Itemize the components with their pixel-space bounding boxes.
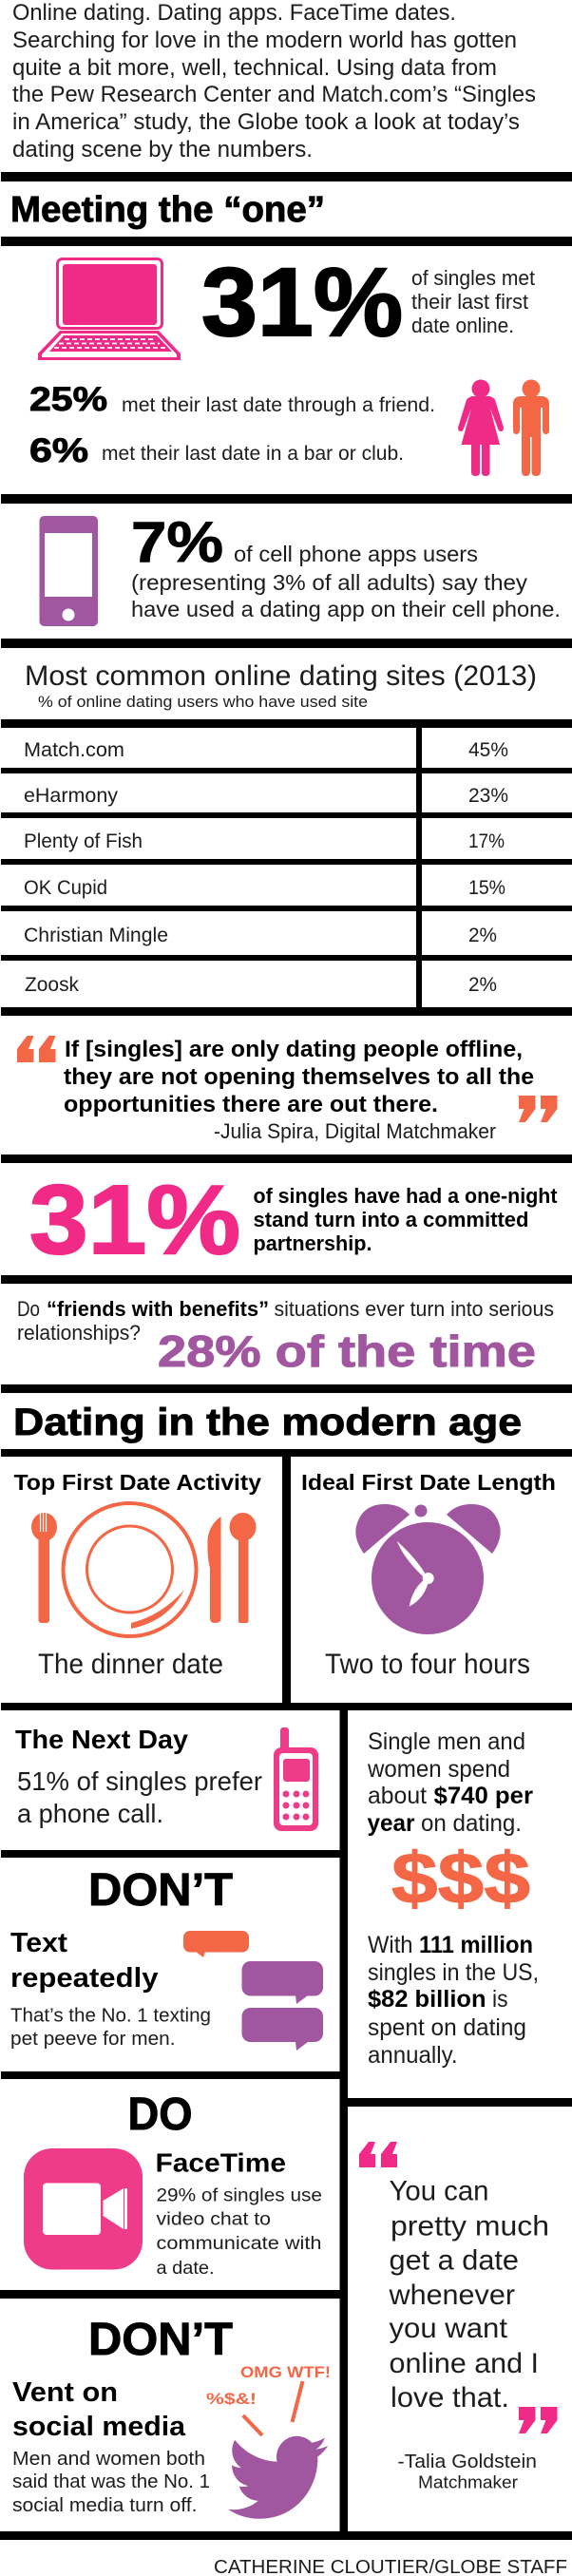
text: one-night stand [253, 1184, 558, 1255]
subheading: Top First Date Activity [13, 1470, 261, 1495]
text: total spending: spent on dating [368, 2014, 526, 2041]
text: total spending: annually. [368, 2042, 458, 2069]
panel: Talia Goldstein quote [359, 2142, 557, 2491]
text: app users [131, 542, 561, 621]
text: of singles met online: date online. [411, 314, 514, 337]
row: Zoosk: 2% [468, 974, 497, 996]
row: Match.com: 45% [468, 739, 508, 761]
subheading: Ideal First Date Length [301, 1470, 556, 1495]
stat: 25 percent: 25% [29, 381, 107, 418]
text: pet peeve [10, 2005, 211, 2050]
attribution: Matchmaker [418, 2472, 518, 2491]
row: OK Cupid: 15% [468, 877, 505, 899]
exclamations: %$&! [206, 2390, 257, 2408]
heading: most common dating sites: Most common online dating sites (2013) [25, 660, 537, 692]
quote text: you want [390, 2313, 508, 2344]
stat: 6 percent: met their last date in a bar or club. [102, 443, 404, 465]
row: Match.com [24, 739, 508, 761]
icon: closing quote [519, 2407, 557, 2433]
subheading: FaceTime: FaceTime [156, 2147, 286, 2178]
panel: the next day [15, 1725, 318, 1831]
quote text: pretty much [391, 2210, 549, 2242]
heading: Dating in the modern age: Dating in the modern age [13, 1402, 522, 1443]
text block: introduction: Searching for love in the modern world has gotten [12, 28, 517, 53]
text: of singles met online [411, 266, 535, 337]
panel: one-night stand stat [29, 1165, 558, 1274]
quote text [388, 2176, 549, 2414]
icon: man [513, 380, 549, 476]
icon: closing quote [519, 1096, 557, 1122]
quote text: You can [390, 2176, 488, 2206]
panel: top first date activity [13, 1470, 261, 1680]
subheading: vent on social media: Vent on [12, 2377, 118, 2408]
attribution: -Julia Spira, Digital Matchmaker [214, 1119, 496, 1143]
quote text [64, 1037, 534, 1117]
text: video chat stat: a date. [156, 2259, 215, 2279]
attribution [397, 2452, 537, 2491]
row: Match.com: Match.com [24, 739, 124, 761]
text: pet peeve: That’s the No. 1 texting [10, 2005, 211, 2026]
exclamations [206, 2363, 331, 2435]
quote text: online and I [390, 2348, 539, 2379]
row: Plenty of Fish: 17% [468, 830, 505, 852]
table: dating sites [24, 739, 508, 996]
text: total spending: is [492, 1986, 507, 2013]
icon: alarm clock [355, 1504, 501, 1634]
heading: DON'T: DON’T [88, 2315, 233, 2365]
heading: DON'T: DON’T [88, 1865, 233, 1916]
text: total spending: 111 million [419, 1932, 533, 1958]
question text [17, 1297, 554, 1345]
big number: 31%: 31% [201, 248, 403, 356]
stat: 6 percent: 6% [29, 432, 88, 469]
text: app users: of cell phone apps users [234, 542, 478, 566]
subheading: vent on social media [12, 2377, 186, 2442]
text: app users: have used a dating app on their cell phone. [131, 597, 561, 621]
icon: bird [228, 2436, 328, 2519]
text: total spending: singles in the US, [368, 1959, 539, 1986]
text block: introduction: dating scene by the numbers. [12, 137, 313, 162]
text: annual spending: on dating. [421, 1810, 522, 1837]
stat: 6 percent [29, 432, 404, 469]
panel: 31 percent met online [38, 248, 535, 360]
text: video chat stat: 29% of singles use [156, 2185, 322, 2206]
subheading: text repeatedly: repeatedly [10, 1963, 159, 1994]
quote text: love that. [391, 2382, 509, 2414]
text: total spending: $82 billion [368, 1986, 486, 2013]
row: eHarmony: eHarmony [24, 785, 119, 807]
text block: introduction: in America” study, the Globe took a look at today’s [12, 109, 520, 135]
heading: most common dating sites [25, 660, 537, 711]
answer: 28% of the time: 28% of the time [158, 1326, 536, 1376]
panel: ideal first date length [301, 1470, 556, 1680]
text: phone call stat [17, 1766, 262, 1828]
big number: 7%: 7% [131, 510, 223, 574]
row: Christian Mingle [24, 925, 497, 946]
icon: video camera [24, 2148, 143, 2269]
attribution: -Talia Goldstein [397, 2452, 537, 2472]
big number: pink 31%: 31% [29, 1165, 240, 1274]
quote text: If [singles] are only dating people offline, [65, 1037, 523, 1062]
panel: friends with benefits [17, 1297, 554, 1376]
text: annual spending [367, 1728, 533, 1837]
text: annual spending: $740 per [433, 1783, 533, 1809]
row: Plenty of Fish [24, 830, 505, 852]
heading: DO: DO [127, 2089, 192, 2140]
text: one-night stand: stand turn into a committed [253, 1208, 528, 1231]
text block: introduction: the Pew Research Center and Match.com’s “Singles [12, 82, 536, 107]
text: of singles met online: their last first [411, 290, 528, 314]
exclamations: OMG WTF! [240, 2363, 331, 2381]
subheading: text repeatedly: Text [10, 1928, 67, 1958]
row: OK Cupid [24, 877, 505, 899]
heading: Meeting the one: Meeting the “one” [10, 190, 325, 230]
text: app users: (representing 3% of all adults) say they [131, 570, 528, 595]
text: turn off [12, 2449, 210, 2516]
subheading: vent on social media: social media [12, 2412, 186, 2442]
question text: Do [17, 1297, 40, 1321]
text: of singles met online: of singles met [411, 266, 535, 290]
text: video chat stat: communicate with [156, 2234, 321, 2254]
icon: cell phone [274, 1727, 318, 1831]
row: Christian Mingle: Christian Mingle [24, 925, 168, 946]
text block: introduction [12, 0, 536, 162]
text: pet peeve: pet peeve for men. [10, 2029, 175, 2050]
icon: dollar signs: $$$ [391, 1839, 530, 1919]
row: Christian Mingle: 2% [468, 925, 497, 946]
question text: relationships? [17, 1321, 141, 1345]
text: annual spending: Single men and [368, 1728, 525, 1755]
row: eHarmony [24, 785, 508, 807]
text: video chat stat [156, 2185, 322, 2279]
quote text: opportunities there are out there. [64, 1092, 438, 1117]
panel: Julia Spira quote [17, 1036, 557, 1143]
panel: spending [367, 1728, 539, 2069]
panel: don't vent on social media [12, 2315, 331, 2519]
text: one-night stand: of singles have had a one-night [253, 1184, 558, 1208]
caption: Two to four hours [325, 1649, 530, 1680]
text: annual spending: women spend [367, 1756, 510, 1783]
caption: The dinner date [38, 1649, 223, 1680]
text block: introduction: Online dating. Dating apps. FaceTime dates. [12, 0, 456, 26]
quote text: whenever [388, 2280, 515, 2311]
text: phone call stat: 51% of singles prefer [17, 1766, 262, 1796]
icon: opening quote [359, 2142, 397, 2167]
row: Plenty of Fish: Plenty of Fish [24, 830, 143, 852]
text: video chat stat: video chat to [156, 2210, 271, 2229]
heading: most common dating sites: % of online dating users who have used site [38, 693, 368, 711]
panel: do FaceTime [24, 2089, 322, 2279]
text block: introduction: quite a bit more, well, technical. Using data from [12, 55, 497, 81]
row: Zoosk: Zoosk [25, 974, 79, 996]
question text: situations ever turn into serious [274, 1297, 554, 1321]
question text: “friends with benefits” [47, 1297, 269, 1321]
row: OK Cupid: OK Cupid [24, 877, 107, 899]
text: turn off: said that was the No. 1 [12, 2471, 210, 2492]
panel: friend and bar stats [29, 380, 549, 476]
text: one-night stand: partnership. [253, 1231, 372, 1255]
text: turn off: social media turn off. [12, 2495, 197, 2516]
row: eHarmony: 23% [468, 785, 508, 807]
text: annual spending: about [368, 1783, 427, 1809]
icon: woman [458, 380, 504, 476]
icon: opening quote [17, 1036, 55, 1062]
text: turn off: Men and women both [12, 2449, 205, 2470]
text: total spending: With [368, 1932, 412, 1958]
text: annual spending: year [367, 1810, 415, 1837]
icon: plate and cutlery [31, 1503, 257, 1636]
quote text: they are not opening themselves to all the [64, 1064, 534, 1090]
panel: don't text repeatedly [10, 1865, 323, 2051]
stat: 25 percent: met their last date through a friend. [122, 394, 435, 416]
subheading: The Next Day [15, 1725, 188, 1754]
row: Zoosk [25, 974, 497, 996]
icon: laptop [38, 258, 181, 360]
panel: dating apps stat [40, 510, 561, 626]
icon: speech bubbles [183, 1931, 323, 2051]
text: phone call stat: a phone call. [17, 1799, 163, 1828]
stat: 25 percent [29, 381, 435, 418]
text: total spending [368, 1932, 539, 2069]
icon: smartphone [40, 516, 98, 626]
subheading: text repeatedly [10, 1928, 159, 1994]
quote text: get a date [390, 2244, 519, 2277]
